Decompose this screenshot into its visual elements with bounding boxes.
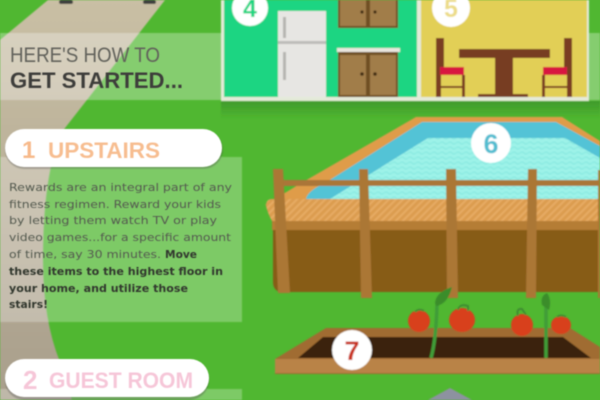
pool: [265, 117, 600, 298]
step 1 body text: of time, say 30 minutes.: [9, 248, 161, 261]
cart wheels: [59, 0, 156, 4]
bed soil: [298, 337, 591, 358]
left chair: [436, 38, 465, 97]
room frame: [221, 0, 589, 101]
garden bed: [275, 287, 600, 374]
step 1 body text: video games...for a specific amount: [9, 231, 232, 244]
fence rail: [283, 180, 600, 186]
lawn shadow under rooms: [221, 101, 600, 119]
step 1 body text: your home, and utilize those: [9, 282, 188, 295]
intro heading: HERE'S HOW TO: [10, 44, 160, 67]
table: [459, 49, 550, 97]
right chair: [542, 38, 572, 97]
pool wall: [273, 230, 600, 292]
upper cabinet: [338, 0, 398, 28]
number badge 4: [232, 0, 268, 26]
bed front: [275, 359, 600, 373]
tomato plants: [431, 302, 546, 358]
step 2 heading pill: GUEST ROOM: [49, 368, 193, 393]
number badge 7: [332, 330, 372, 370]
step 2 pill shadow: [5, 361, 209, 400]
bed frame: [275, 328, 600, 374]
number badge 6: [471, 123, 511, 163]
number badge 7: 7: [344, 336, 360, 366]
step 1 text panel: [0, 157, 242, 322]
step 1 pill shadow: [5, 131, 223, 169]
intro overlay panel: [0, 33, 222, 100]
step 1 body text: Rewards are an integral part of any: [9, 181, 233, 194]
step 1 body text: stairs!: [9, 298, 48, 311]
fence posts: [273, 169, 600, 298]
deck shadow band: [272, 221, 600, 230]
roof tip: [428, 388, 472, 400]
pool deck: [266, 199, 600, 221]
kitchen room: [224, 0, 417, 97]
tomatoes: [408, 308, 571, 336]
step 2 text panel: [0, 389, 242, 400]
step 1 body text: these items to the highest floor in: [9, 265, 223, 278]
step 1 body text: Move: [165, 248, 197, 261]
step 2 heading pill: [5, 359, 209, 397]
step 1 body text: fitness regimen. Reward your kids: [9, 198, 221, 211]
fridge: [278, 11, 326, 97]
countertop: [337, 48, 400, 52]
step 1 body text: [9, 181, 233, 311]
pool rim: [265, 117, 600, 205]
step 2 heading pill: 2: [23, 365, 37, 395]
intro heading: GET STARTED...: [10, 68, 183, 93]
pool water edge: [306, 122, 600, 201]
intro heading: [10, 44, 183, 93]
number badge 5: [432, 0, 470, 27]
step 1 heading pill: 1: [22, 137, 35, 164]
step 1 heading pill: UPSTAIRS: [48, 138, 160, 163]
garden path: [0, 0, 165, 400]
lower cabinet: [338, 52, 398, 97]
step 1 body text: by letting them watch TV or play: [9, 214, 218, 227]
step 1 heading pill: [5, 129, 222, 167]
right overlay strip: [588, 33, 600, 100]
number badge 6: 6: [483, 129, 499, 159]
dining room: [421, 0, 587, 97]
pool water: [330, 138, 600, 199]
